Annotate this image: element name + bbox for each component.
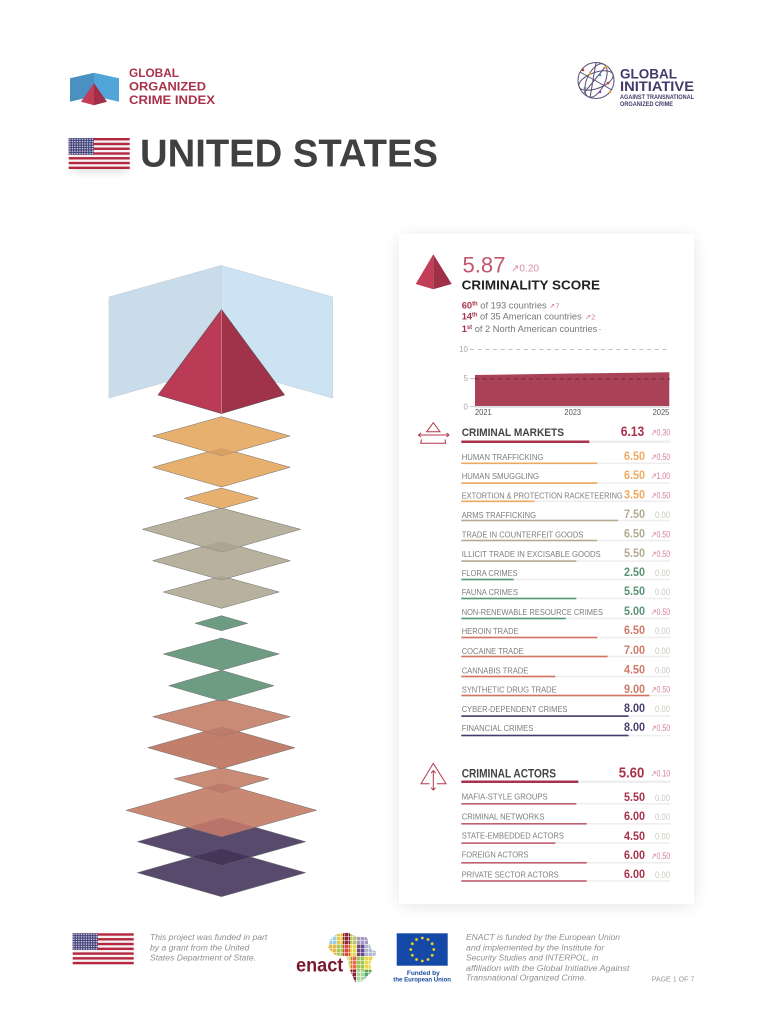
row: criminal networks: [461, 811, 670, 825]
market layers: [126, 417, 317, 897]
footer text: ENACT: Transnational Organized Crime.: [466, 974, 587, 983]
row: heroin trade: 6.50: [624, 625, 645, 637]
logo: Global Organized Crime Index: GLOBAL: [129, 68, 179, 80]
section: criminal markets: [461, 423, 670, 443]
rankings: ↗2: [585, 313, 595, 322]
criminality score heading: [462, 253, 600, 292]
row: fauna crimes: 5.50: [624, 586, 645, 598]
rankings: 1: [462, 324, 468, 335]
icon: criminal markets: [418, 423, 449, 443]
row: foreign actors: [461, 850, 670, 864]
footer text: ENACT: affiliation with the Global Initiative Against: [466, 964, 630, 973]
logo: Global Initiative: INITIATIVE: [620, 78, 694, 94]
section: criminal markets: CRIMINAL MARKETS: [462, 427, 564, 439]
row: fauna crimes: [461, 586, 670, 599]
rankings: th: [472, 301, 478, 307]
row: flora crimes: 0.00: [655, 568, 670, 578]
area chart: score over time: [459, 345, 670, 417]
footer text: ENACT: ENACT is funded by the European Union: [466, 933, 621, 942]
score pyramid: [158, 310, 284, 414]
row: synthetic drug trade: 9.00: [624, 684, 645, 696]
section: criminal actors: 5.60: [619, 766, 644, 782]
row: synthetic drug trade: [461, 684, 670, 696]
footer flag: [73, 933, 134, 964]
row: state-embedded actors: 0.00: [655, 832, 670, 842]
rankings: -: [599, 325, 602, 334]
row: flora crimes: FLORA CRIMES: [462, 568, 518, 578]
logo: Global Organized Crime Index: ORGANIZED: [129, 82, 206, 94]
row: excisable goods: [461, 548, 670, 562]
footer text: US funding: States Department of State.: [150, 954, 256, 963]
row: cocaine trade: COCAINE TRADE: [462, 646, 524, 656]
row: counterfeit goods: ↗0.50: [651, 529, 670, 539]
row: counterfeit goods: TRADE IN COUNTERFEIT GOODS: [462, 529, 584, 539]
row: human trafficking: 6.50: [624, 451, 645, 463]
footer text: US funding: [150, 933, 268, 963]
logo: Global Initiative: ORGANIZED CRIME: [620, 102, 673, 108]
row: foreign actors: FOREIGN ACTORS: [462, 850, 529, 860]
row: private sector actors: [461, 869, 670, 882]
row: human smuggling: 6.50: [624, 470, 645, 482]
logo: Global Organized Crime Index: CRIME INDEX: [129, 95, 215, 107]
footer text: US funding: by a grant from the United: [150, 943, 250, 952]
row: financial crimes: ↗0.50: [651, 723, 670, 733]
row: cannabis trade: CANNABIS TRADE: [462, 665, 529, 675]
panel: scores: [399, 234, 694, 904]
row: state-embedded actors: STATE-EMBEDDED ACTORS: [462, 831, 564, 841]
logo: enact: enact: [296, 956, 344, 977]
row: cyber-dependent crimes: 0.00: [655, 704, 670, 714]
area chart: score over time: 2025: [653, 407, 670, 417]
row: fauna crimes: 0.00: [655, 587, 670, 597]
row: flora crimes: [461, 567, 670, 580]
row: arms trafficking: 0.00: [655, 510, 670, 520]
row: human smuggling: [461, 470, 670, 484]
section: criminal markets: ↗0.30: [651, 428, 670, 438]
title: UNITED STATES: [140, 133, 438, 176]
row: heroin trade: 0.00: [655, 626, 670, 636]
icon: criminal actors: [421, 763, 446, 790]
section: criminal markets: 6.13: [621, 423, 644, 439]
row: foreign actors: ↗0.50: [651, 851, 670, 861]
area chart: score over time: 10: [459, 345, 469, 354]
rankings: 14: [462, 312, 473, 323]
row: cyber-dependent crimes: 8.00: [624, 703, 645, 715]
footer text: ENACT: [466, 933, 630, 983]
row: criminal networks: 0.00: [655, 812, 670, 822]
row: synthetic drug trade: ↗0.50: [651, 684, 670, 694]
row: extortion: EXTORTION & PROTECTION RACKETEERING: [462, 490, 623, 500]
row: excisable goods: ILLICIT TRADE IN EXCISABLE GOODS: [462, 549, 601, 559]
row: flora crimes: 2.50: [624, 567, 645, 579]
row: heroin trade: HEROIN TRADE: [462, 626, 519, 636]
row: criminal networks: 6.00: [624, 811, 645, 823]
row: extortion: [461, 490, 670, 502]
rankings: [462, 300, 602, 335]
row: cannabis trade: 4.50: [624, 664, 645, 676]
row: counterfeit goods: 6.50: [624, 528, 645, 540]
rankings: st: [467, 325, 472, 331]
row: cyber-dependent crimes: CYBER-DEPENDENT CRIMES: [462, 704, 568, 714]
row: foreign actors: 6.00: [624, 850, 645, 862]
rankings: 60: [462, 300, 472, 311]
row: state-embedded actors: [461, 831, 670, 844]
area chart: score over time: 2023: [564, 407, 581, 417]
footer text: ENACT: Security Studies and INTERPOL, in: [466, 954, 599, 963]
row: cannabis trade: [461, 664, 670, 677]
row: counterfeit goods: [461, 528, 670, 541]
row: extortion: ↗0.50: [651, 490, 670, 500]
rankings: of 193 countries: [478, 300, 547, 311]
row: non-renewable resources: 5.00: [624, 606, 645, 618]
footer text: US funding: This project was funded in part: [150, 933, 268, 942]
row: cocaine trade: [461, 645, 670, 657]
row: heroin trade: [461, 625, 670, 638]
row: private sector actors: PRIVATE SECTOR ACTORS: [462, 870, 559, 880]
logo: EU flag: [393, 933, 451, 984]
row: fauna crimes: FAUNA CRIMES: [462, 587, 518, 597]
pyramid chart: criminality stack: [109, 266, 332, 897]
criminality score heading: ↗0.20: [511, 263, 539, 275]
row: financial crimes: [461, 722, 670, 736]
blue walls: [109, 266, 332, 398]
row: excisable goods: ↗0.50: [651, 549, 670, 559]
row: human smuggling: ↗1.00: [651, 471, 670, 481]
row: human trafficking: HUMAN TRAFFICKING: [462, 452, 543, 462]
row: non-renewable resources: NON-RENEWABLE RESOURCE CRIMES: [462, 607, 603, 617]
logo: Global Initiative: GLOBAL: [620, 65, 677, 81]
logo: Global Initiative: AGAINST TRANSNATIONAL: [620, 95, 694, 101]
row: extortion: 3.50: [624, 490, 645, 502]
row: mafia-style groups: 0.00: [655, 793, 670, 803]
row: arms trafficking: 7.50: [624, 509, 645, 521]
area chart: score over time: 5: [464, 374, 469, 383]
row: mafia-style groups: [461, 792, 670, 805]
row: non-renewable resources: ↗0.50: [651, 607, 670, 617]
logo: EU flag: Funded by: [407, 970, 440, 977]
row: financial crimes: 8.00: [624, 722, 645, 734]
section: criminal actors: [461, 766, 670, 783]
logo: enact: [296, 932, 378, 982]
rankings: ↗7: [549, 301, 559, 310]
row: arms trafficking: ARMS TRAFFICKING: [462, 510, 536, 520]
icon: criminality pyramid: [416, 254, 452, 289]
row: human trafficking: ↗0.50: [651, 452, 670, 462]
row: cocaine trade: 7.00: [624, 645, 645, 657]
row: state-embedded actors: 4.50: [624, 831, 645, 843]
criminality score heading: CRIMINALITY SCORE: [462, 278, 600, 292]
row: cocaine trade: 0.00: [655, 646, 670, 656]
area chart: score over time: 2021: [475, 407, 492, 417]
rankings: of 35 American countries: [477, 312, 582, 323]
criminality score heading: 5.87: [462, 253, 506, 278]
row: private sector actors: 0.00: [655, 870, 670, 880]
logo: Global Initiative: [576, 60, 694, 108]
section: criminal actors: ↗0.10: [651, 769, 670, 779]
row: cannabis trade: 0.00: [655, 665, 670, 675]
row: non-renewable resources: [461, 606, 670, 619]
country flag: [69, 138, 130, 173]
area chart: score over time: 0: [464, 402, 469, 412]
rankings: of 2 North American countries: [472, 324, 598, 335]
page number: PAGE 1 OF 7: [652, 975, 694, 984]
row: private sector actors: 6.00: [624, 869, 645, 881]
row: excisable goods: 5.50: [624, 548, 645, 560]
row: cyber-dependent crimes: [461, 703, 670, 717]
logo: Global Organized Crime Index: [70, 68, 215, 107]
row: synthetic drug trade: SYNTHETIC DRUG TRADE: [462, 684, 557, 694]
footer text: ENACT: and implemented by the Institute for: [466, 944, 605, 953]
rankings: th: [472, 313, 478, 319]
section: criminal actors: CRIMINAL ACTORS: [462, 768, 556, 780]
logo: EU flag: the European Union: [393, 977, 451, 984]
row: mafia-style groups: MAFIA-STYLE GROUPS: [462, 792, 548, 802]
row: mafia-style groups: 5.50: [624, 792, 645, 804]
row: arms trafficking: [461, 509, 670, 521]
row: human smuggling: HUMAN SMUGGLING: [462, 471, 539, 481]
row: financial crimes: FINANCIAL CRIMES: [462, 723, 534, 733]
row: human trafficking: [461, 451, 670, 464]
row: criminal networks: CRIMINAL NETWORKS: [462, 811, 545, 821]
